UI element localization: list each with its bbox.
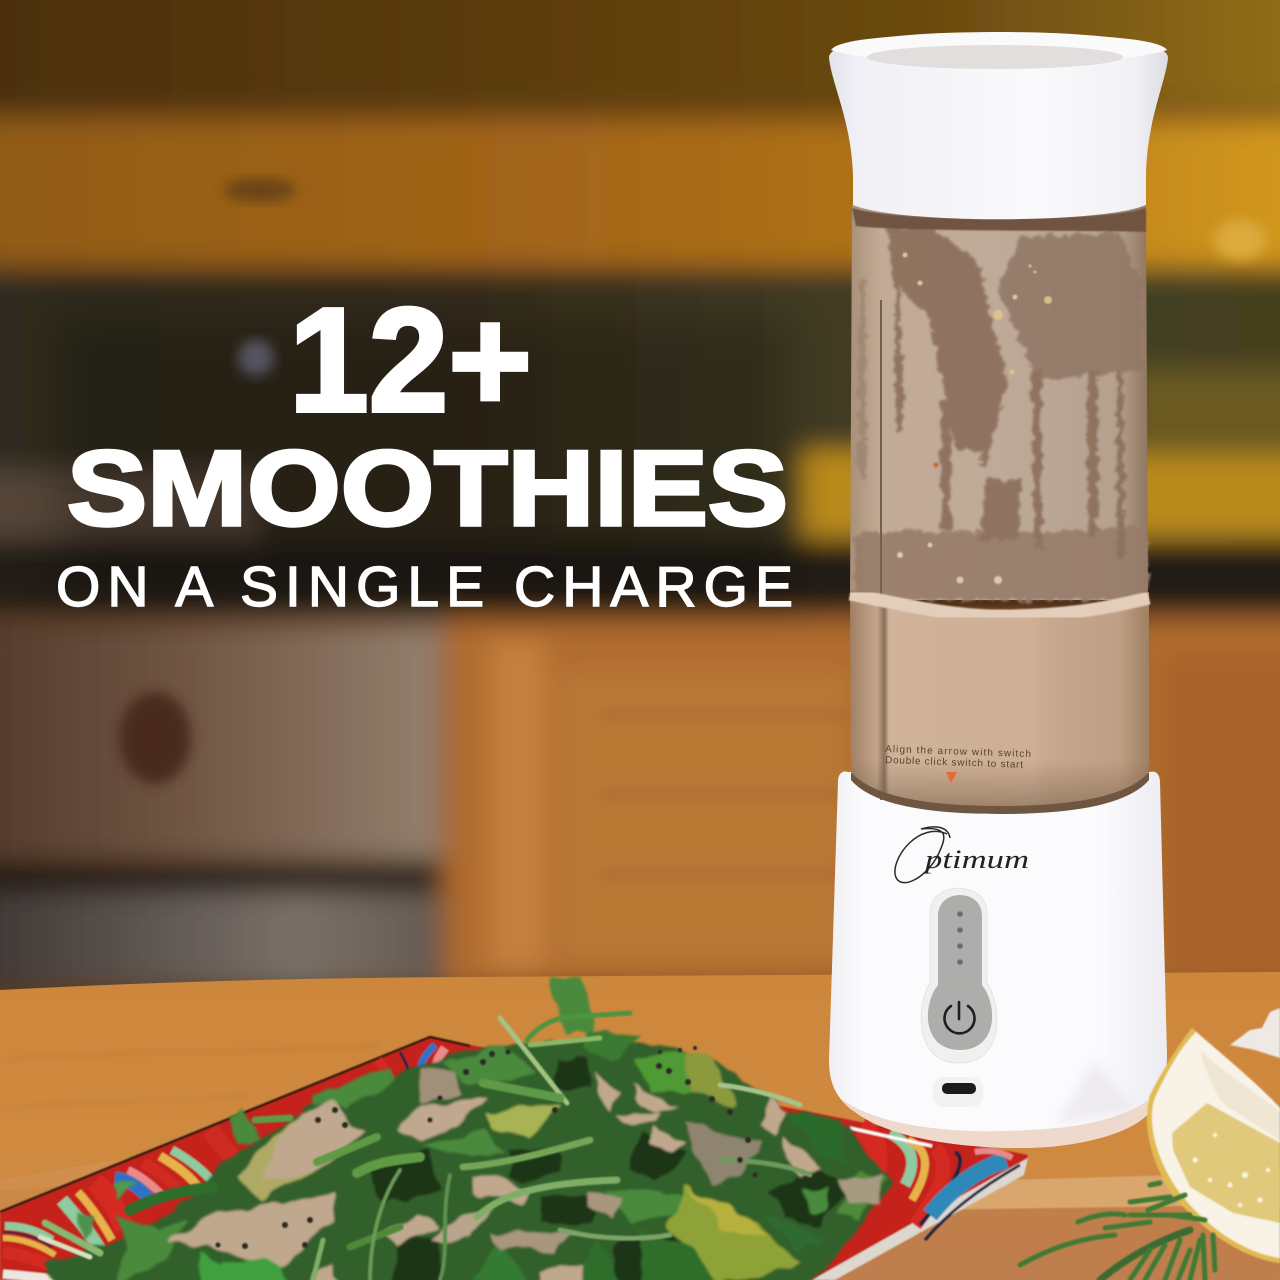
mid leaves (78, 975, 890, 1280)
plate painted pattern right (850, 1128, 1020, 1240)
base bottom ring (840, 1098, 1148, 1148)
salad greens mass (45, 1040, 895, 1280)
jar instruction text: Double click switch to start (885, 755, 1023, 771)
dark gaps (370, 1060, 850, 1280)
headline number: 12+ (289, 278, 532, 443)
subheading: ON A SINGLE CHARGE (56, 555, 793, 619)
lid (829, 32, 1168, 219)
garlic skin (1230, 1008, 1280, 1058)
salad stems and seeds (40, 1013, 810, 1280)
lemon wedge (1147, 1028, 1280, 1263)
chia seeds (216, 1046, 758, 1249)
plate painted pattern left (3, 1045, 445, 1280)
control panel (921, 888, 997, 1063)
foam line (850, 594, 1149, 616)
jar bottom ring (851, 772, 1149, 814)
usb-c port (933, 1077, 983, 1107)
salad (45, 975, 895, 1280)
base (829, 771, 1167, 1148)
optimum logo: ptimum (922, 845, 1029, 874)
headline smoothies: SMOOTHIES (67, 428, 788, 548)
jar upper with residue (850, 205, 1148, 800)
icon: power (944, 1002, 974, 1033)
plate (0, 1037, 1028, 1280)
blurred oven knob and spots (119, 692, 191, 784)
avocado chunks (670, 1187, 800, 1280)
rosemary sprig (1020, 1183, 1215, 1280)
headline shadow (60, 320, 790, 600)
battery indicator dots (957, 911, 963, 965)
blender (829, 32, 1168, 1148)
jar instruction text (885, 744, 1031, 771)
residue specks (897, 252, 1052, 584)
base shadow (1055, 1060, 1135, 1125)
optimum logo (895, 827, 1029, 883)
arrow mark (946, 772, 957, 783)
dressing (167, 1070, 885, 1280)
jar instruction text: Align the arrow with switch (885, 744, 1031, 760)
wooden table (0, 972, 1280, 1280)
smoothie liquid (850, 590, 1149, 808)
